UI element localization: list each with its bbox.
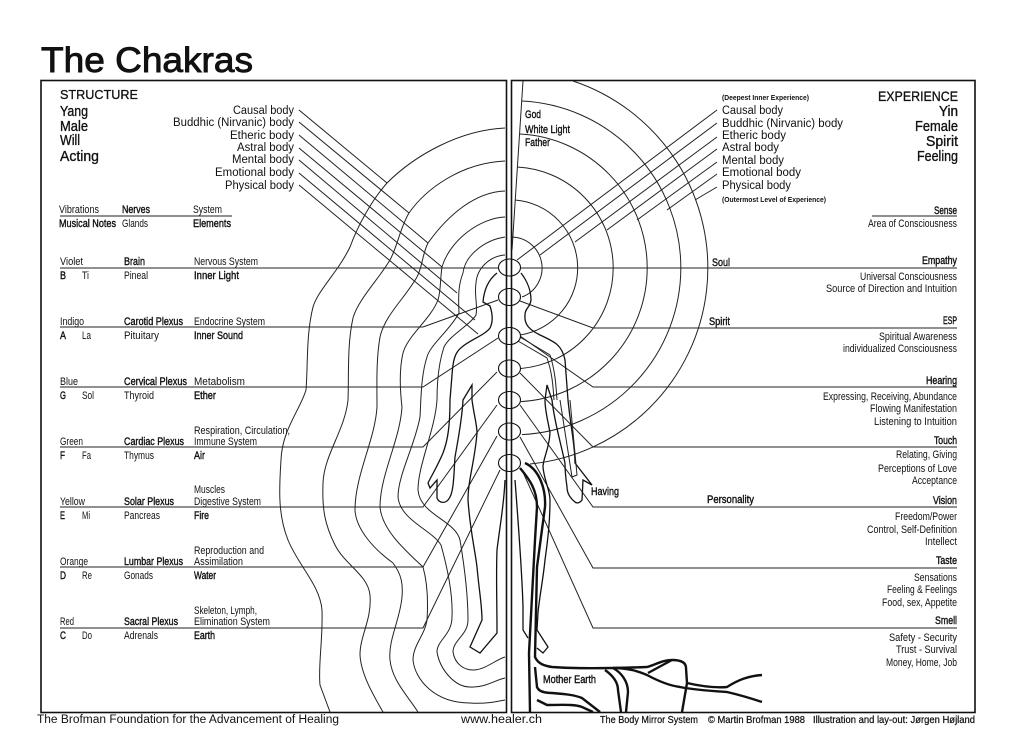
left body labels: Physical body bbox=[225, 180, 294, 192]
row: yellow: Yellow bbox=[60, 496, 86, 508]
heading: experience: Feeling bbox=[917, 148, 958, 165]
center labels: god: Father bbox=[525, 137, 550, 149]
row: indigo: La bbox=[82, 330, 92, 342]
left column headers: Musical Notes bbox=[59, 218, 116, 230]
left column headers: System bbox=[193, 204, 222, 216]
row: blue bbox=[60, 376, 245, 402]
left body labels: Mental body bbox=[232, 154, 294, 166]
row: green: Cardiac Plexus bbox=[124, 436, 184, 448]
row: violet: Violet bbox=[60, 256, 84, 268]
row: green: F bbox=[60, 450, 65, 462]
row: yellow: Mi bbox=[82, 510, 90, 522]
sense header: Sense bbox=[934, 205, 957, 217]
title: The Chakras bbox=[41, 41, 253, 80]
row: taste: Taste bbox=[936, 555, 957, 567]
row: empathy: Universal Consciousness bbox=[860, 271, 957, 283]
right body labels: Etheric body bbox=[722, 130, 786, 142]
row: red: Skeleton, Lymph, bbox=[194, 605, 257, 617]
row: empathy: Empathy bbox=[922, 255, 957, 267]
row: touch: Perceptions of Love bbox=[878, 463, 957, 475]
row: red: C bbox=[60, 630, 66, 642]
row: hearing bbox=[823, 375, 957, 428]
panel: right frame bbox=[512, 80, 975, 712]
row: blue: Cervical Plexus bbox=[124, 376, 187, 388]
row: violet bbox=[60, 256, 258, 282]
row: orange: Lumbar Plexus bbox=[124, 556, 183, 568]
row: taste bbox=[882, 555, 957, 609]
right body labels: (Outermost Level of Experience) bbox=[722, 195, 826, 204]
left body labels: Causal body bbox=[233, 105, 294, 117]
right body labels: Mental body bbox=[722, 155, 784, 167]
row: green: Fa bbox=[82, 450, 91, 462]
row: blue: Blue bbox=[60, 376, 78, 388]
row: yellow: Muscles bbox=[194, 484, 225, 496]
footer bbox=[37, 714, 975, 726]
row: green: Air bbox=[194, 450, 205, 462]
left column headers bbox=[59, 204, 231, 230]
row: empathy bbox=[712, 255, 957, 295]
right body labels: Buddhic (Nirvanic) body bbox=[722, 118, 843, 130]
row: indigo: Indigo bbox=[60, 316, 84, 328]
row: green: Respiration, Circulation, bbox=[194, 425, 290, 437]
row: indigo: Endocrine System bbox=[194, 316, 265, 328]
footer: The Body Mirror System bbox=[600, 714, 698, 726]
row: orange: Assimilation bbox=[194, 556, 243, 568]
row: yellow: Pancreas bbox=[124, 510, 160, 522]
footer: Illustration and lay-out: Jørgen Højland bbox=[813, 714, 975, 726]
aura contours left bbox=[280, 128, 505, 712]
right body labels: (Deepest Inner Experience) bbox=[722, 93, 809, 102]
row: violet: Brain bbox=[124, 256, 145, 268]
row: indigo: Pituitary bbox=[124, 330, 159, 342]
row: touch bbox=[878, 435, 957, 487]
row: esp: Spiritual Awareness bbox=[879, 331, 957, 343]
row: hearing: Listening to Intuition bbox=[874, 416, 957, 428]
row: vision: Control, Self-Definition bbox=[867, 524, 957, 536]
row: blue: Ether bbox=[194, 390, 216, 402]
row: orange: Orange bbox=[60, 556, 88, 568]
row: orange: Gonads bbox=[124, 570, 153, 582]
center labels: god: God bbox=[525, 109, 541, 121]
row: indigo: A bbox=[60, 330, 66, 342]
row lines left and connectors bbox=[60, 216, 500, 628]
heading: experience bbox=[878, 89, 959, 165]
row: red: Earth bbox=[194, 630, 215, 642]
row: violet: Pineal bbox=[124, 270, 148, 282]
row: touch: Acceptance bbox=[912, 475, 957, 487]
row: smell: Money, Home, Job bbox=[886, 657, 957, 669]
row: vision: Personality bbox=[707, 494, 754, 506]
heading: structure: STRUCTURE bbox=[60, 87, 138, 102]
row: hearing: Flowing Manifestation bbox=[870, 403, 957, 415]
sense header: Area of Consciousness bbox=[868, 218, 957, 230]
row: touch: Relating, Giving bbox=[896, 449, 957, 461]
row: red bbox=[60, 605, 270, 642]
footer: The Brofman Foundation for the Advancement of Healing bbox=[37, 714, 339, 726]
left column headers: Glands bbox=[122, 218, 148, 230]
row: orange bbox=[60, 545, 264, 582]
row: hearing: Expressing, Receiving, Abundance bbox=[823, 391, 957, 403]
row: violet: B bbox=[60, 270, 66, 282]
row: green: Green bbox=[60, 436, 83, 448]
row: touch: Touch bbox=[934, 435, 957, 447]
row: green: Immune System bbox=[194, 436, 257, 448]
left column headers: Vibrations bbox=[59, 204, 99, 216]
heading: structure: Yang bbox=[60, 103, 88, 120]
left body labels: Etheric body bbox=[230, 130, 294, 142]
heading: experience: Yin bbox=[939, 103, 958, 120]
row: vision: Vision bbox=[933, 495, 957, 507]
center labels: god bbox=[525, 109, 571, 149]
row: smell: Smell bbox=[935, 615, 957, 627]
chakra circles bbox=[498, 259, 520, 472]
heading: experience: Female bbox=[915, 118, 958, 135]
row: vision: Intellect bbox=[925, 536, 958, 548]
row: smell: Trust - Survival bbox=[896, 644, 957, 656]
row: orange: Re bbox=[82, 570, 92, 582]
row: taste: Feeling & Feelings bbox=[887, 584, 957, 596]
row: red: Sacral Plexus bbox=[124, 616, 178, 628]
row: yellow: Solar Plexus bbox=[124, 496, 174, 508]
right body labels: Emotional body bbox=[722, 167, 801, 179]
row: orange: Reproduction and bbox=[194, 545, 264, 557]
body rays left bbox=[299, 110, 478, 334]
row: taste: Sensations bbox=[914, 572, 957, 584]
left body labels bbox=[173, 105, 294, 192]
row: esp: Spirit bbox=[709, 316, 731, 328]
row: esp: individualized Consciousness bbox=[843, 343, 957, 355]
row: vision bbox=[591, 486, 958, 548]
row: esp: ESP bbox=[943, 315, 957, 327]
row: blue: G bbox=[60, 390, 66, 402]
right body labels: Astral body bbox=[722, 142, 779, 154]
left column headers: Nerves bbox=[122, 204, 150, 216]
row: yellow: E bbox=[60, 510, 65, 522]
row: yellow bbox=[60, 484, 261, 522]
row: yellow: Digestive System bbox=[194, 496, 261, 508]
sense header bbox=[868, 205, 957, 230]
right body labels: Causal body bbox=[722, 105, 783, 117]
row: indigo bbox=[60, 316, 265, 342]
row: smell bbox=[886, 615, 957, 669]
row: yellow: Fire bbox=[194, 510, 209, 522]
row: blue: Thyroid bbox=[124, 390, 154, 402]
aura arcs right bbox=[512, 81, 708, 464]
row lines right and connectors bbox=[520, 216, 957, 628]
row: esp bbox=[709, 315, 957, 355]
row: vision: Having bbox=[591, 486, 619, 498]
row: smell: Safety - Security bbox=[889, 632, 957, 644]
right body labels: Physical body bbox=[722, 180, 791, 192]
right body labels bbox=[722, 93, 843, 204]
row: taste: Food, sex, Appetite bbox=[882, 597, 957, 609]
row: vision: Freedom/Power bbox=[895, 511, 957, 523]
row: red: Elimination System bbox=[194, 616, 270, 628]
row: hearing: Hearing bbox=[926, 375, 957, 387]
left column headers: Elements bbox=[193, 218, 231, 230]
row: green bbox=[60, 425, 290, 462]
row: orange: Water bbox=[194, 570, 216, 582]
row: blue: Metabolism bbox=[194, 376, 245, 388]
row: red: Do bbox=[82, 630, 92, 642]
row: empathy: Soul bbox=[712, 257, 730, 269]
left body labels: Emotional body bbox=[215, 167, 294, 179]
row: empathy: Source of Direction and Intuition bbox=[826, 283, 957, 295]
center labels: god: White Light bbox=[525, 124, 571, 136]
footer: www.healer.ch bbox=[460, 714, 542, 726]
body rays right bbox=[517, 110, 717, 260]
heading: experience: EXPERIENCE bbox=[878, 89, 958, 104]
heading: experience: Spirit bbox=[926, 133, 959, 150]
heading: structure bbox=[60, 87, 138, 165]
row: red: Adrenals bbox=[124, 630, 158, 642]
left body labels: Buddhic (Nirvanic) body bbox=[173, 117, 294, 129]
heading: structure: Acting bbox=[60, 148, 99, 165]
row: red: Red bbox=[60, 616, 74, 628]
footer: © Martin Brofman 1988 bbox=[708, 714, 805, 726]
mother earth label: Mother Earth bbox=[543, 674, 596, 686]
left body labels: Astral body bbox=[237, 142, 294, 154]
row: green: Thymus bbox=[124, 450, 154, 462]
heading: structure: Male bbox=[60, 118, 88, 135]
row: violet: Nervous System bbox=[194, 256, 258, 268]
row: violet: Inner Light bbox=[194, 270, 240, 282]
row: indigo: Inner Sound bbox=[194, 330, 243, 342]
row: violet: Ti bbox=[82, 270, 89, 282]
heading: structure: Will bbox=[60, 132, 80, 149]
row: indigo: Carotid Plexus bbox=[124, 316, 183, 328]
figure: human body bbox=[428, 273, 592, 653]
earth roots bbox=[520, 463, 762, 712]
row: orange: D bbox=[60, 570, 66, 582]
panel: left frame bbox=[41, 80, 506, 712]
row: blue: Sol bbox=[82, 390, 94, 402]
